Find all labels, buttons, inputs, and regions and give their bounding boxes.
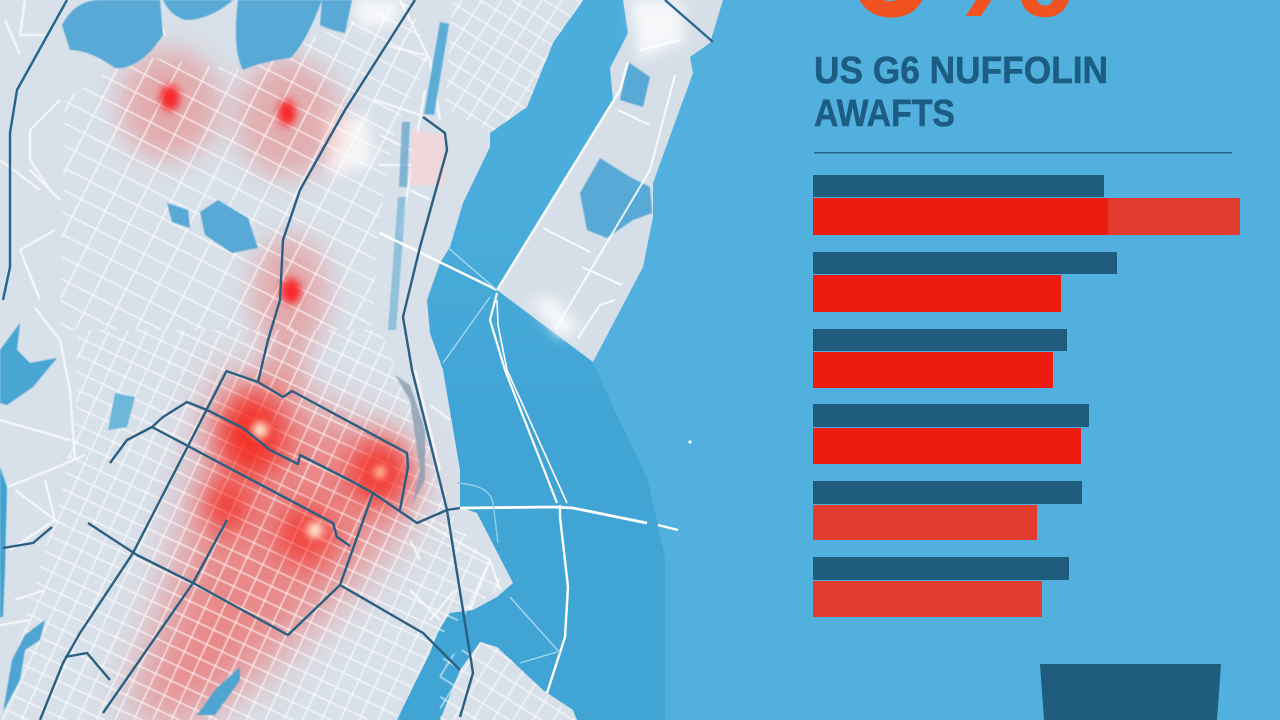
streets: lower grid bbox=[0, 320, 520, 720]
route: south cross bbox=[152, 427, 350, 546]
route: east loop bbox=[226, 371, 408, 510]
big percentage, cropped by the top edge bbox=[847, 0, 1075, 49]
route: lower loop bbox=[88, 493, 373, 635]
interchange dot in bay bbox=[688, 440, 692, 444]
heat: wide halos bbox=[120, 50, 415, 720]
streets: north-east grid bbox=[446, 0, 583, 130]
panel: map bbox=[0, 0, 723, 720]
route: south-west bbox=[103, 520, 227, 713]
pale blocks bbox=[322, 0, 685, 338]
row 1 bbox=[813, 175, 1240, 235]
streets: organic lines bbox=[0, 0, 500, 625]
row 2 bbox=[813, 252, 1117, 312]
divider bbox=[814, 152, 1232, 154]
bottom dark shape bbox=[1040, 664, 1221, 720]
river bands bbox=[388, 22, 449, 505]
row 4 bbox=[813, 404, 1089, 464]
route: river bbox=[403, 117, 473, 717]
route: north-east bbox=[665, 0, 713, 42]
land: main city bbox=[0, 0, 583, 720]
streets: upper grid bbox=[60, 4, 428, 330]
route: lower diagonal bbox=[340, 585, 460, 670]
row 5 bbox=[813, 481, 1082, 540]
heading: AWAFTS bbox=[814, 93, 955, 135]
bar chart bbox=[813, 175, 1240, 617]
row 6 bbox=[813, 557, 1069, 617]
route: north-west bbox=[3, 0, 67, 300]
heading: US G6 NUFFOLIN bbox=[814, 50, 1108, 92]
heat: hot cores bbox=[160, 85, 410, 565]
transit routes bbox=[3, 0, 713, 720]
streets: south island grid bbox=[440, 640, 580, 720]
streets bbox=[0, 0, 590, 720]
water: bay and river bbox=[400, 0, 665, 720]
route: central bbox=[258, 0, 415, 382]
route: north cross bbox=[110, 402, 460, 523]
land: south island bbox=[440, 642, 577, 720]
route: west spine bbox=[40, 370, 227, 720]
streets: east island bbox=[497, 40, 680, 338]
row 3 bbox=[813, 329, 1067, 388]
route: short branch bbox=[65, 653, 110, 680]
water: ponds bbox=[0, 0, 652, 715]
land: east island bbox=[497, 0, 723, 362]
highways: white bbox=[380, 233, 678, 693]
heading bbox=[814, 50, 1108, 135]
